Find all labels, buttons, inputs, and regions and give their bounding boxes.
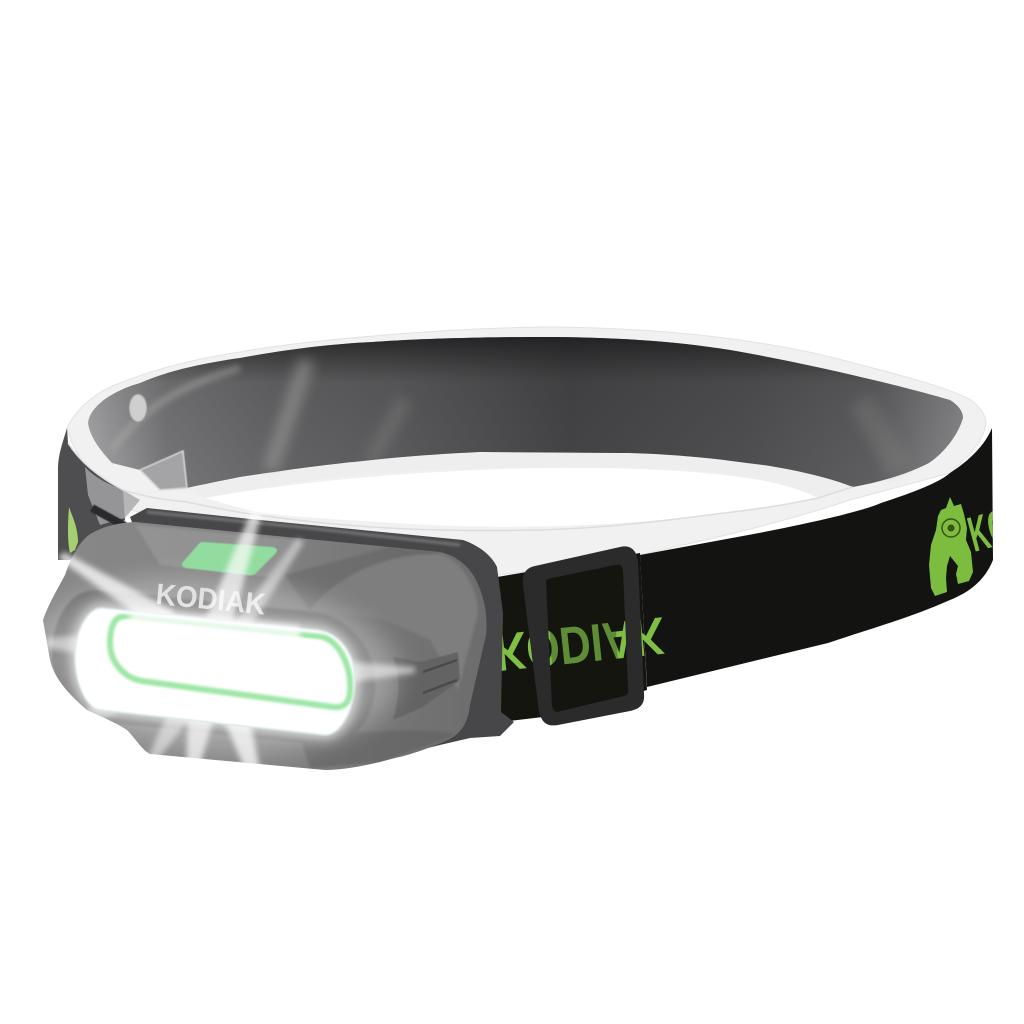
buckle — [523, 546, 644, 725]
back shell — [130, 508, 514, 760]
strap: section through buckle — [497, 553, 647, 722]
brand text on housing: KODIAK — [154, 578, 267, 622]
lens bezel — [52, 590, 375, 745]
side vents — [393, 652, 460, 720]
upper facet — [135, 525, 300, 577]
green logo fragment on left strap — [68, 507, 78, 553]
band inner back wall — [88, 337, 963, 488]
strap behind clear band on left — [58, 428, 140, 560]
clear plastic band: outer rim — [67, 327, 986, 575]
clip tab inside band — [140, 451, 187, 490]
band front edge highlight — [68, 443, 853, 531]
illustration: KODIAK LED headlamp — [43, 326, 993, 770]
rivet on band — [129, 394, 147, 422]
front body — [43, 522, 487, 770]
LED lens — [75, 608, 355, 735]
strap brand text, near buckle: KODIAK — [492, 605, 667, 682]
glow on body — [43, 568, 408, 762]
lens bloom — [71, 604, 359, 739]
strap loop inside buckle — [548, 569, 620, 708]
headlamp housing — [23, 508, 514, 782]
band lower inner rim — [187, 453, 853, 498]
light flare rays — [46, 510, 415, 782]
green COB LED outline — [110, 617, 350, 707]
central light bloom — [130, 610, 300, 650]
bear logo on strap — [929, 497, 993, 596]
open interior of band — [205, 468, 818, 527]
strap: right section — [640, 428, 1024, 687]
reflection streaks on back wall — [270, 360, 307, 470]
green power button — [182, 542, 277, 575]
